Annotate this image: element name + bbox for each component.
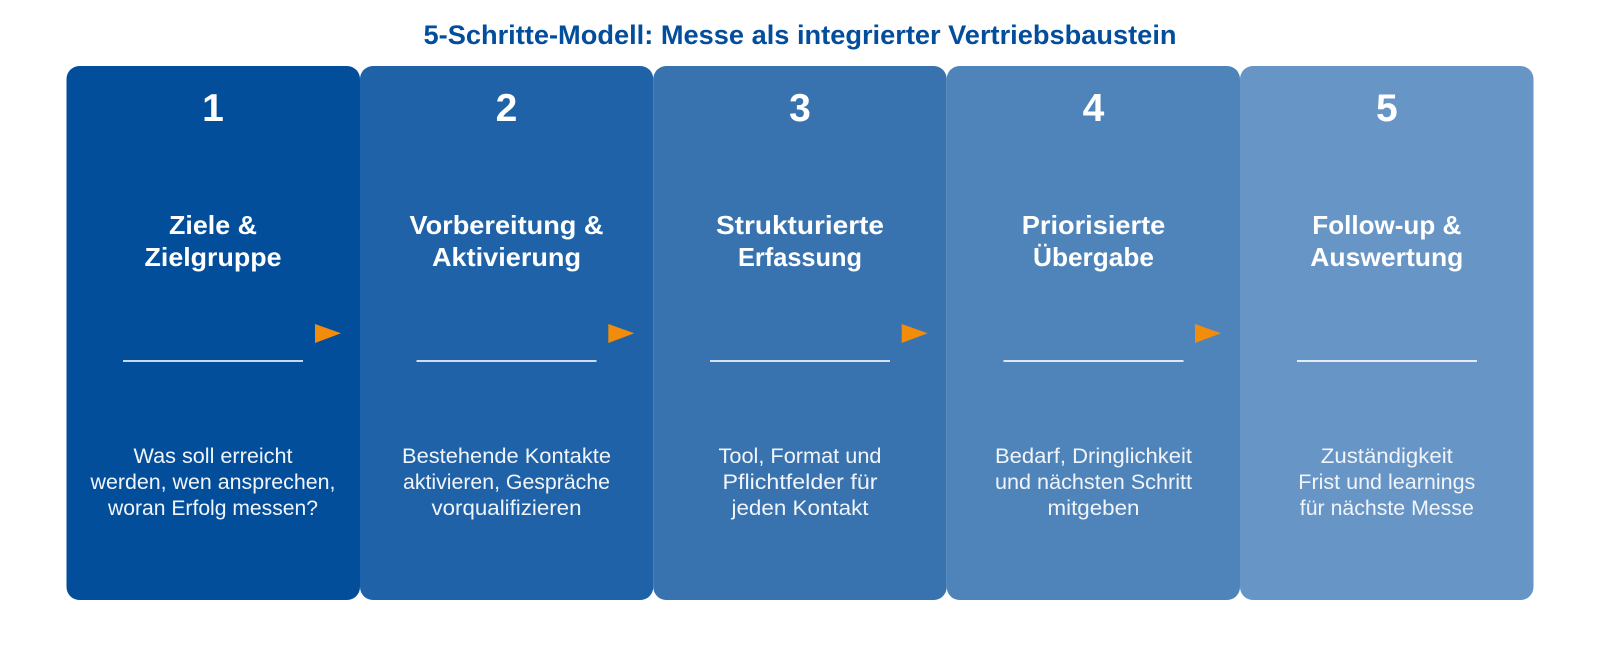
text: step 4: und nächsten Schritt xyxy=(995,471,1192,494)
number 1: 1 xyxy=(202,87,224,130)
text: step 4: mitgeben xyxy=(1048,497,1140,520)
divider: step 5 xyxy=(1297,360,1477,362)
text: step 3: Tool, Format und xyxy=(718,445,882,468)
text: step 5: Frist und learnings xyxy=(1298,471,1475,494)
number 2: 2 xyxy=(496,87,517,130)
text: step 1: werden, wen ansprechen, xyxy=(89,471,336,494)
text: step 2: vorqualifizieren xyxy=(432,497,582,520)
text: step 2: Bestehende Kontakte xyxy=(402,445,611,468)
heading: step 3: Erfassung xyxy=(738,242,862,272)
text: step 1 xyxy=(89,445,336,520)
heading: step 4: Priorisierte xyxy=(1022,210,1165,240)
heading: step 1 xyxy=(144,210,282,272)
heading: step 1: Ziele & xyxy=(169,210,257,240)
divider: step 1 xyxy=(123,360,303,362)
divider: step 3 xyxy=(710,360,890,362)
text: step 1: Was soll erreicht xyxy=(134,445,293,468)
text: step 3: jeden Kontakt xyxy=(730,497,869,520)
text: step 4 xyxy=(995,445,1192,520)
panel: step 4 xyxy=(947,66,1240,600)
text: step 1: woran Erfolg messen? xyxy=(107,497,318,520)
number 5: 5 xyxy=(1376,87,1398,130)
text: step 2: aktivieren, Gespräche xyxy=(403,471,610,494)
arrow: step 3 to 4 xyxy=(902,324,928,343)
heading: step 4 xyxy=(1022,210,1165,272)
text: step 4: Bedarf, Dringlichkeit xyxy=(995,445,1192,468)
heading: step 2 xyxy=(410,210,604,272)
heading: step 1: Zielgruppe xyxy=(144,242,282,272)
panel: step 5 xyxy=(1240,66,1534,600)
heading: step 3 xyxy=(716,210,884,272)
text: step 5 xyxy=(1298,445,1475,520)
text: step 5: Zuständigkeit xyxy=(1321,445,1453,468)
heading: step 4: Übergabe xyxy=(1033,242,1154,272)
number 3: 3 xyxy=(789,87,811,130)
arrow: step 2 to 3 xyxy=(608,324,634,343)
arrow: step 4 to 5 xyxy=(1195,324,1221,343)
heading: step 5: Auswertung xyxy=(1310,242,1463,272)
text: step 5: für nächste Messe xyxy=(1300,497,1474,520)
heading: step 2: Vorbereitung & xyxy=(410,210,604,240)
arrow: step 1 to 2 xyxy=(315,324,341,343)
heading: step 5: Follow-up & xyxy=(1312,210,1461,240)
number 4: 4 xyxy=(1083,87,1105,130)
panel: step 1 xyxy=(66,66,360,600)
divider: step 4 xyxy=(1004,360,1184,362)
heading: step 2: Aktivierung xyxy=(432,242,581,272)
heading: step 5 xyxy=(1310,210,1463,272)
text: step 2 xyxy=(402,445,611,520)
divider: step 2 xyxy=(416,360,596,362)
title: 5-Schritte-Modell: Messe als integrierter Vertriebsbaustein xyxy=(424,20,1176,50)
text: step 3 xyxy=(718,445,882,520)
text: step 3: Pflichtfelder für xyxy=(722,471,878,494)
heading: step 3: Strukturierte xyxy=(716,210,884,240)
panel: step 2 xyxy=(360,66,653,600)
panel: step 3 xyxy=(653,66,947,600)
